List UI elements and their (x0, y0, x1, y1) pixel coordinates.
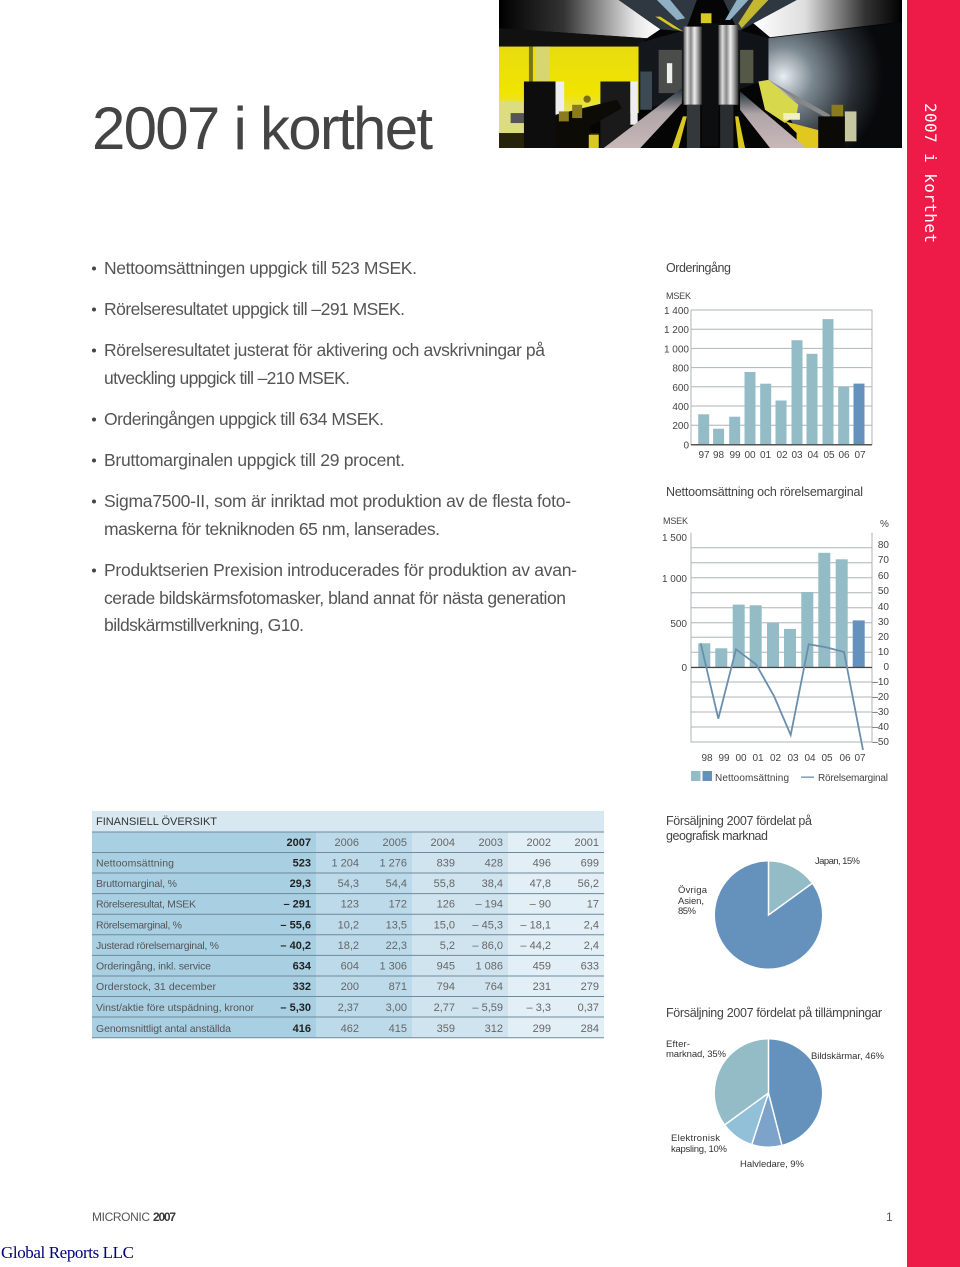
row: Rörelsemarginal: – 45,3 (472, 920, 503, 932)
row: Genomsnittligt antal anställda: 462 (341, 1023, 359, 1035)
pie heading: geografisk marknad: geografisk marknad (666, 829, 768, 843)
chart: Nettoomsättning och rörelsemarginal: 50 (878, 586, 889, 597)
pie chart: tillämpningar: Elektronisk (671, 1133, 720, 1144)
chart: Nettoomsättning och rörelsemarginal: 80 (878, 540, 889, 551)
chart: Orderingång: 1 000 (664, 344, 689, 356)
row: Genomsnittligt antal anställda: 312 (485, 1023, 503, 1035)
row: Bruttomarginal: 55,8 (434, 878, 455, 890)
footer: MICRONIC 2007: MICRONIC (92, 1210, 150, 1224)
row: Orderstock: 332 (293, 981, 311, 993)
chart legend (691, 771, 888, 784)
row: Vinst per aktie: 0,37 (578, 1002, 599, 1014)
chart: Orderingång: 06 (838, 450, 850, 461)
chart: Nettoomsättning och rörelsemarginal: 500 (670, 619, 687, 630)
table header row: 2002 (527, 837, 551, 849)
bullet list: maskerna för tekniknoden 65 nm, lanserades. (104, 519, 440, 539)
row: Rörelsemarginal: 10,2 (338, 920, 359, 932)
row: Vinst per aktie: 3,00 (386, 1002, 407, 1014)
table header row: 2006 (335, 837, 359, 849)
row: Genomsnittligt antal anställda: Genomsnittligt antal anställda (96, 1023, 231, 1035)
pie chart: geografisk marknad (666, 814, 861, 968)
chart: Nettoomsättning och rörelsemarginal: 70 (878, 555, 889, 566)
pie chart: tillämpningar: Efter- (666, 1039, 690, 1050)
row: Rörelsemarginal: – 18,1 (520, 920, 551, 932)
row: Bruttomarginal: 29,3 (290, 878, 311, 890)
chart: Nettoomsättning och rörelsemarginal (662, 485, 889, 784)
row: Vinst per aktie: – 3,3 (527, 1002, 551, 1014)
table: Finansiell översikt (92, 811, 604, 1038)
side band text: 2007 i korthet (921, 103, 940, 243)
chart: Orderingång: 05 (823, 450, 835, 461)
row: Rörelseresultat: – 90 (530, 898, 551, 910)
row: Nettoomsättning (96, 858, 599, 870)
table header row (287, 837, 599, 849)
footer: MICRONIC 2007: 2007 (153, 1210, 176, 1224)
bullet list (92, 258, 577, 635)
chart: Orderingång: 200 (672, 421, 689, 432)
chart: Nettoomsättning och rörelsemarginal: 01 (752, 753, 764, 764)
row: Nettoomsättning: 1 276 (379, 858, 407, 870)
chart: Orderingång: 01 (760, 450, 771, 461)
chart: Nettoomsättning och rörelsemarginal: 20 (878, 632, 889, 643)
row: Rörelsemarginal (96, 920, 599, 932)
chart: Orderingång: 600 (672, 383, 689, 394)
chart: Nettoomsättning och rörelsemarginal: 07 (854, 753, 866, 764)
table heading: FINANSIELL ÖVERSIKT (96, 816, 217, 828)
chart: Nettoomsättning och rörelsemarginal: 00 (735, 753, 747, 764)
pie chart: tillämpningar: Bildskärmar, 46% (811, 1051, 885, 1062)
row: Orderingång: 1 306 (379, 960, 407, 972)
chart: Nettoomsättning och rörelsemarginal: 04 (804, 753, 816, 764)
chart: Nettoomsättning och rörelsemarginal: % (880, 519, 889, 530)
row: Nettoomsättning: 1 204 (331, 858, 359, 870)
bullet list: bildskärmstillverkning, G10. (104, 615, 304, 635)
row: Bruttomarginal: 47,8 (530, 878, 551, 890)
chart: Orderingång: 02 (776, 450, 788, 461)
table header row: 2001 (575, 837, 599, 849)
chart: Orderingång: 1 400 (664, 306, 689, 317)
row: Justerad rörelsemarginal: 18,2 (338, 940, 359, 952)
row: Orderstock (96, 981, 599, 993)
row: Bruttomarginal (96, 878, 599, 890)
row: Orderingång: 459 (533, 960, 551, 972)
row: Vinst per aktie: 2,77 (434, 1002, 455, 1014)
row: Vinst per aktie: Vinst/aktie före utspädning, kronor (96, 1002, 254, 1014)
footer: MICRONIC 2007 (92, 1210, 176, 1224)
row: Nettoomsättning: 523 (293, 858, 311, 870)
row: Orderingång: 634 (293, 960, 312, 972)
chart: Nettoomsättning och rörelsemarginal: 05 (821, 753, 833, 764)
row: Orderingång (96, 960, 599, 972)
footer: Global Reports LLC: Global Reports LLC (1, 1243, 134, 1262)
pie chart: tillämpningar (666, 1006, 885, 1170)
row: Rörelsemarginal: 15,0 (434, 920, 455, 932)
chart: Nettoomsättning och rörelsemarginal: 60 (878, 571, 889, 582)
bullet list: Nettoomsättningen uppgick till 523 MSEK. (104, 258, 417, 278)
chart: Nettoomsättning och rörelsemarginal: –20 (872, 692, 889, 703)
chart: Orderingång (664, 261, 872, 461)
title: 2007 i korthet (92, 95, 433, 162)
row: Genomsnittligt antal anställda (96, 1023, 599, 1035)
chart: Nettoomsättning och rörelsemarginal: 30 (878, 617, 889, 628)
row: Justerad rörelsemarginal: 2,4 (584, 940, 599, 952)
table header row: 2004 (431, 837, 455, 849)
chart: Orderingång: 99 (729, 450, 741, 461)
bullet list: Rörelseresultatet justerat för aktivering och avskrivningar på (104, 340, 545, 360)
chart: Orderingång: 1 200 (664, 325, 689, 336)
photo: machine interior (499, 0, 902, 148)
row: Bruttomarginal: 54,4 (386, 878, 407, 890)
row: Bruttomarginal: Bruttomarginal, % (96, 878, 177, 890)
pie chart: geografisk marknad: 85% (678, 906, 697, 917)
row: Rörelseresultat: 126 (437, 898, 455, 910)
chart: Nettoomsättning och rörelsemarginal: –50 (872, 737, 889, 748)
row: Rörelsemarginal: Rörelsemarginal, % (96, 920, 182, 932)
chart heading: Orderingång: Orderingång (666, 261, 731, 275)
row: Nettoomsättning: 428 (485, 858, 503, 870)
chart: Orderingång: 0 (683, 440, 689, 452)
bullet list: Bruttomarginalen uppgick till 29 procent. (104, 450, 405, 470)
row: Bruttomarginal: 56,2 (578, 878, 599, 890)
row: Bruttomarginal: 54,3 (338, 878, 359, 890)
pie chart: tillämpningar: Halvledare, 9% (740, 1159, 805, 1170)
chart legend: Nettoomsättning (715, 773, 789, 784)
bullet list: Rörelseresultatet uppgick till –291 MSEK. (104, 299, 405, 319)
row: Genomsnittligt antal anställda: 415 (389, 1023, 407, 1035)
row: Orderstock: 764 (485, 981, 503, 993)
row: Orderingång: 1 086 (475, 960, 503, 972)
chart: Orderingång: 400 (672, 402, 689, 413)
row: Nettoomsättning: 496 (533, 858, 551, 870)
chart: Orderingång: 98 (713, 450, 724, 461)
row: Orderstock: 871 (389, 981, 407, 993)
chart: Nettoomsättning och rörelsemarginal: –40 (872, 722, 889, 733)
row: Orderstock: 231 (533, 981, 551, 993)
row: Orderingång: 945 (437, 960, 455, 972)
row: Rörelseresultat: 123 (341, 898, 359, 910)
chart: Nettoomsättning och rörelsemarginal: 10 (878, 647, 889, 658)
row: Genomsnittligt antal anställda: 299 (533, 1023, 551, 1035)
row: Nettoomsättning: 699 (581, 858, 599, 870)
row: Nettoomsättning: Nettoomsättning (96, 858, 174, 870)
row: Rörelseresultat: – 194 (475, 898, 503, 910)
row: Genomsnittligt antal anställda: 284 (581, 1023, 599, 1035)
chart: Nettoomsättning och rörelsemarginal: MSEK (663, 516, 688, 526)
chart: Orderingång: 97 (698, 450, 710, 461)
row: Justerad rörelsemarginal: 22,3 (386, 940, 407, 952)
bullet list: Orderingången uppgick till 634 MSEK. (104, 409, 384, 429)
row: Vinst per aktie (96, 1002, 599, 1014)
pie chart: tillämpningar: kapsling, 10% (671, 1144, 728, 1155)
row: Rörelsemarginal: – 55,6 (280, 920, 311, 932)
row: Justerad rörelsemarginal: – 44,2 (520, 940, 551, 952)
chart: Nettoomsättning och rörelsemarginal: 40 (878, 602, 889, 613)
bullet list: utveckling uppgick till –210 MSEK. (104, 368, 350, 388)
chart heading: Nettoomsättning och rörelsemarginal: Nettoomsättning och rörelsemarginal (666, 485, 863, 499)
row: Vinst per aktie: 2,37 (338, 1002, 359, 1014)
row: Justerad rörelsemarginal: 5,2 (440, 940, 455, 952)
row: Genomsnittligt antal anställda: 416 (293, 1023, 311, 1035)
red side band (907, 0, 960, 1267)
row: Orderstock: Orderstock, 31 december (96, 981, 216, 993)
pie heading: geografisk marknad (666, 814, 812, 843)
row: Vinst per aktie: – 5,30 (280, 1002, 311, 1014)
row: Rörelseresultat: 17 (587, 898, 599, 910)
chart: Nettoomsättning och rörelsemarginal: 02 (770, 753, 781, 764)
row: Vinst per aktie: – 5,59 (472, 1002, 503, 1014)
chart: Orderingång: 04 (807, 450, 819, 461)
chart: Nettoomsättning och rörelsemarginal: 0 (681, 663, 687, 674)
row: Orderstock: 794 (437, 981, 455, 993)
pie chart: geografisk marknad: Övriga (678, 885, 708, 896)
chart legend: Rörelsemarginal (818, 773, 888, 784)
chart: Nettoomsättning och rörelsemarginal: 03 (787, 753, 799, 764)
row: Rörelsemarginal: 2,4 (584, 920, 599, 932)
pie chart: geografisk marknad: Asien, (678, 896, 704, 907)
page number: 1 (886, 1210, 893, 1224)
chart: Nettoomsättning och rörelsemarginal: –30 (872, 707, 889, 718)
bullet list: Produktserien Prexision introducerades för produktion av avan- (104, 560, 577, 580)
row: Orderstock: 200 (341, 981, 359, 993)
row: Orderstock: 279 (581, 981, 599, 993)
row: Rörelseresultat (96, 898, 599, 910)
row: Justerad rörelsemarginal: – 40,2 (280, 940, 311, 952)
chart: Nettoomsättning och rörelsemarginal: 0 (883, 662, 889, 673)
chart: Orderingång: 800 (672, 364, 689, 374)
row: Justerad rörelsemarginal: – 86,0 (472, 940, 503, 952)
row: Bruttomarginal: 38,4 (482, 878, 503, 890)
bullet list: Sigma7500-II, som är inriktad mot produktion av de flesta foto- (104, 491, 571, 511)
chart: Orderingång: 03 (791, 450, 803, 461)
chart: Orderingång: MSEK (666, 291, 691, 301)
row: Justerad rörelsemarginal (96, 940, 599, 952)
chart: Nettoomsättning och rörelsemarginal: –10 (872, 677, 889, 688)
pie heading: geografisk marknad: Försäljning 2007 fördelat på (666, 814, 812, 828)
row: Nettoomsättning: 839 (437, 858, 455, 870)
pie heading: tillämpningar: Försäljning 2007 fördelat på tillämpningar (666, 1006, 882, 1020)
row: Rörelseresultat: 172 (389, 898, 407, 910)
table header row: 2007 (287, 837, 311, 849)
row: Rörelseresultat: Rörelseresultat, MSEK (96, 898, 196, 910)
table header row: 2003 (479, 837, 503, 849)
pie chart: tillämpningar: marknad, 35% (666, 1049, 727, 1060)
row: Orderingång: 604 (341, 960, 359, 972)
row: Genomsnittligt antal anställda: 359 (437, 1023, 455, 1035)
row: Orderingång: 633 (581, 960, 599, 972)
chart: Nettoomsättning och rörelsemarginal: 1 500 (662, 533, 687, 544)
chart: Orderingång: 07 (854, 450, 866, 461)
chart: Nettoomsättning och rörelsemarginal: 1 000 (662, 574, 687, 585)
chart: Nettoomsättning och rörelsemarginal: 99 (718, 753, 730, 764)
chart: Nettoomsättning och rörelsemarginal: 98 (701, 753, 713, 764)
row: Rörelseresultat: – 291 (283, 898, 311, 910)
pie chart: geografisk marknad: Japan, 15% (815, 856, 861, 867)
row: Orderingång: Orderingång, inkl. service (96, 960, 211, 972)
bullet list: cerade bildskärmsfotomasker, bland annat för nästa generation (104, 588, 566, 608)
chart: Nettoomsättning och rörelsemarginal: 06 (839, 753, 851, 764)
table header row: 2005 (383, 837, 407, 849)
row: Justerad rörelsemarginal: Justerad rörelsemarginal, % (96, 940, 219, 952)
row: Rörelsemarginal: 13,5 (386, 920, 407, 932)
chart: Orderingång: 00 (744, 450, 756, 461)
